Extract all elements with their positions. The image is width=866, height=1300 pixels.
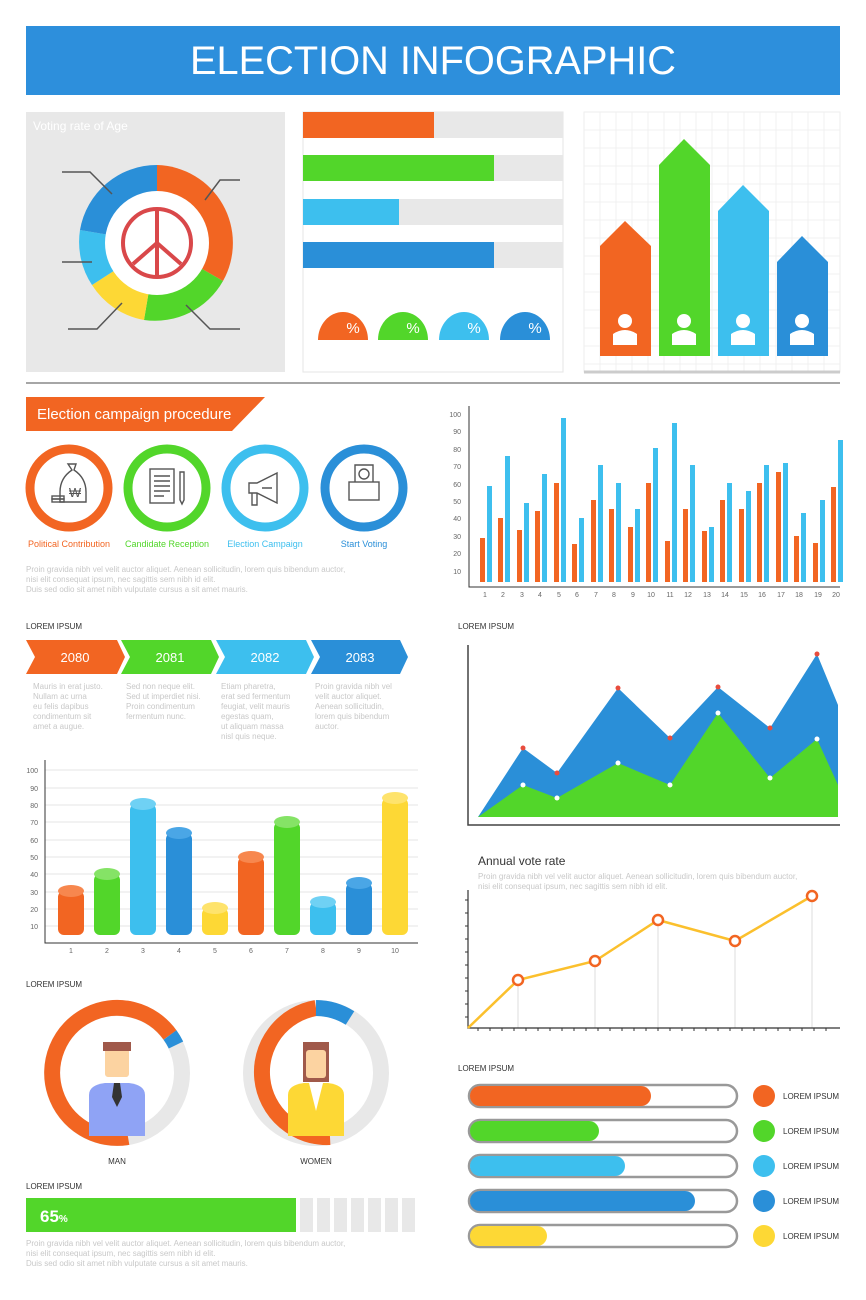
bar chart: 20 pairs: 5 — [557, 592, 561, 599]
timeline text: erat sed fermentum — [221, 692, 291, 701]
3d cylinder bar chart: 5 — [213, 948, 217, 955]
text block: nisi elit consequat ipsum, nec sagittis sem nibh id elit. — [478, 882, 667, 891]
3d cylinder bar chart: 60 — [30, 838, 38, 845]
panel: voting rate of age donut: Voting rate of Age — [33, 119, 128, 133]
bar chart: 20 pairs: 16 — [758, 592, 766, 599]
area chart — [468, 645, 840, 825]
campaign step icons: Political Contribution — [28, 539, 110, 549]
text block: nisi elit consequat ipsum, nec sagittis sem nibh id elit. — [26, 1249, 215, 1258]
heading: annual vote rate: Annual vote rate — [478, 854, 566, 868]
campaign step icons: Start Voting — [341, 539, 387, 549]
timeline text: auctor. — [315, 722, 339, 731]
capsule bar chart with legend — [469, 1085, 839, 1247]
heading: election campaign procedure — [26, 397, 265, 431]
text block: Duis sed odio sit amet nibh vulputate cursus a sit amet mauris. — [26, 1259, 248, 1268]
bar chart: 20 pairs: 10 — [647, 592, 655, 599]
label: lorem ipsum timeline: LOREM IPSUM — [26, 622, 82, 631]
bar chart: 20 pairs: 1 — [483, 592, 487, 599]
timeline text: lorem quis bibendum — [315, 712, 390, 721]
bar chart: 20 pairs: 4 — [538, 592, 542, 599]
capsule bar chart with legend: LOREM IPSUM — [783, 1162, 839, 1171]
heading: election campaign procedure: Election campaign procedure — [37, 406, 231, 423]
bar chart: 20 pairs: 10 — [453, 569, 461, 576]
text block: Proin gravida nibh vel velit auctor aliquet. Aenean sollicitudin, lorem quis bibendum auctor, — [26, 1239, 345, 1248]
bar chart: 20 pairs: 6 — [575, 592, 579, 599]
text block: Duis sed odio sit amet nibh vulputate cursus a sit amet mauris. — [26, 585, 248, 594]
timeline text: nisl quis neque. — [221, 732, 277, 741]
progress bar 65% — [26, 1198, 415, 1232]
bar chart: 20 pairs: 11 — [666, 592, 674, 599]
3d cylinder bar chart: 70 — [30, 820, 38, 827]
bar chart: 20 pairs: 70 — [453, 464, 461, 471]
percent badges: % — [528, 320, 542, 337]
bar chart: 20 pairs: 18 — [795, 592, 803, 599]
3d cylinder bar chart: 8 — [321, 948, 325, 955]
timeline text: Mauris in erat justo. — [33, 682, 103, 691]
text block — [478, 872, 797, 891]
label: lorem ipsum progress: LOREM IPSUM — [26, 1182, 82, 1191]
3d cylinder bar chart: 90 — [30, 786, 38, 793]
3d cylinder bar chart: 20 — [30, 907, 38, 914]
timeline text: Proin gravida nibh vel — [315, 682, 392, 691]
campaign step icons: Election Campaign — [227, 539, 303, 549]
3d cylinder bar chart: 50 — [30, 855, 38, 862]
bar chart: 20 pairs: 90 — [453, 429, 461, 436]
timeline chevrons: 2080 — [61, 650, 89, 665]
3d cylinder bar chart: 2 — [105, 948, 109, 955]
label: lorem ipsum area chart: LOREM IPSUM — [458, 622, 514, 631]
timeline text: condimentum sit — [33, 712, 92, 721]
bar chart: 20 pairs: 30 — [453, 534, 461, 541]
percent badges: % — [467, 320, 481, 337]
3d cylinder bar chart — [26, 760, 418, 955]
bar chart: 20 pairs: 80 — [453, 447, 461, 454]
3d cylinder bar chart: 6 — [249, 948, 253, 955]
capsule bar chart with legend: LOREM IPSUM — [783, 1197, 839, 1206]
donut: women: WOMEN — [300, 1157, 332, 1166]
bar chart: 20 pairs: 19 — [814, 592, 822, 599]
3d cylinder bar chart: 10 — [391, 948, 399, 955]
timeline text — [33, 682, 392, 741]
bar chart: 20 pairs: 17 — [777, 592, 785, 599]
3d cylinder bar chart: 30 — [30, 890, 38, 897]
timeline chevrons: 2081 — [156, 650, 184, 665]
campaign step icons: ₩ — [69, 485, 82, 500]
campaign step icons — [28, 449, 403, 549]
text block: Proin gravida nibh vel velit auctor aliquet. Aenean sollicitudin, lorem quis bibendum auctor, — [478, 872, 797, 881]
bar chart: 20 pairs: 7 — [594, 592, 598, 599]
timeline chevrons: 2083 — [346, 650, 374, 665]
bar chart: 20 pairs: 20 — [832, 592, 840, 599]
bar chart: 20 pairs: 100 — [449, 412, 461, 419]
3d cylinder bar chart: 9 — [357, 948, 361, 955]
timeline chevrons — [26, 640, 408, 674]
bar chart: 20 pairs: 13 — [703, 592, 711, 599]
campaign step icons: Candidate Reception — [125, 539, 209, 549]
timeline text: egestas quam, — [221, 712, 273, 721]
timeline text: ut aliquam massa — [221, 722, 284, 731]
capsule bar chart with legend: LOREM IPSUM — [783, 1127, 839, 1136]
percent badges: % — [346, 320, 360, 337]
title: ELECTION INFOGRAPHIC — [190, 39, 676, 83]
progress bar 65%: 65% — [40, 1207, 68, 1226]
percent badges — [318, 312, 550, 340]
timeline text: Sed ut imperdiet nisi. — [126, 692, 201, 701]
bar chart: 20 pairs: 50 — [453, 499, 461, 506]
capsule bar chart with legend: LOREM IPSUM — [783, 1232, 839, 1241]
3d cylinder bar chart: 40 — [30, 872, 38, 879]
bar chart: 20 pairs: 3 — [520, 592, 524, 599]
panel: voting rate of age donut — [26, 112, 285, 372]
text block: Proin gravida nibh vel velit auctor aliquet. Aenean sollicitudin, lorem quis bibendum auctor, — [26, 565, 345, 574]
bar chart: 20 pairs: 2 — [501, 592, 505, 599]
text block — [26, 1239, 345, 1268]
line chart — [465, 890, 840, 1031]
capsule bar chart with legend: LOREM IPSUM — [783, 1092, 839, 1101]
label: lorem ipsum capsule bars: LOREM IPSUM — [458, 1064, 514, 1073]
donut: man: MAN — [108, 1157, 126, 1166]
bar chart: 20 pairs: 14 — [721, 592, 729, 599]
donut: women — [251, 1008, 381, 1166]
bar chart: 20 pairs — [449, 406, 843, 599]
timeline text: Nullam ac urna — [33, 692, 87, 701]
timeline text: feugiat, velit mauris — [221, 702, 290, 711]
bar chart: 20 pairs: 8 — [612, 592, 616, 599]
donut chart — [79, 165, 233, 321]
text block: nisi elit consequat ipsum, nec sagittis sem nibh id elit. — [26, 575, 215, 584]
donut: man — [52, 1008, 182, 1166]
3d cylinder bar chart: 4 — [177, 948, 181, 955]
3d cylinder bar chart: 7 — [285, 948, 289, 955]
timeline text: amet a augue. — [33, 722, 84, 731]
text block — [26, 565, 345, 594]
label: lorem ipsum gender: LOREM IPSUM — [26, 980, 82, 989]
bar chart: 20 pairs: 60 — [453, 482, 461, 489]
bar chart: 20 pairs: 15 — [740, 592, 748, 599]
3d cylinder bar chart: 100 — [26, 768, 38, 775]
panel: arrow chart — [584, 112, 840, 372]
timeline text: Proin condimentum — [126, 702, 195, 711]
timeline text: fermentum nunc. — [126, 712, 186, 721]
bar chart: 20 pairs: 12 — [684, 592, 692, 599]
timeline text: eu felis dapibus — [33, 702, 89, 711]
bar chart: 20 pairs: 9 — [631, 592, 635, 599]
panel: horizontal bars — [303, 112, 563, 372]
timeline text: Aenean sollicitudin, — [315, 702, 384, 711]
bar chart: 20 pairs: 20 — [453, 551, 461, 558]
percent badges: % — [406, 320, 420, 337]
3d cylinder bar chart: 1 — [69, 948, 73, 955]
3d cylinder bar chart: 3 — [141, 948, 145, 955]
timeline text: velit auctor aliquet. — [315, 692, 382, 701]
3d cylinder bar chart: 10 — [30, 924, 38, 931]
timeline text: Etiam pharetra, — [221, 682, 276, 691]
bar chart: 20 pairs: 40 — [453, 516, 461, 523]
timeline chevrons: 2082 — [251, 650, 279, 665]
3d cylinder bar chart: 80 — [30, 803, 38, 810]
title — [26, 26, 840, 95]
timeline text: Sed non neque elit. — [126, 682, 195, 691]
